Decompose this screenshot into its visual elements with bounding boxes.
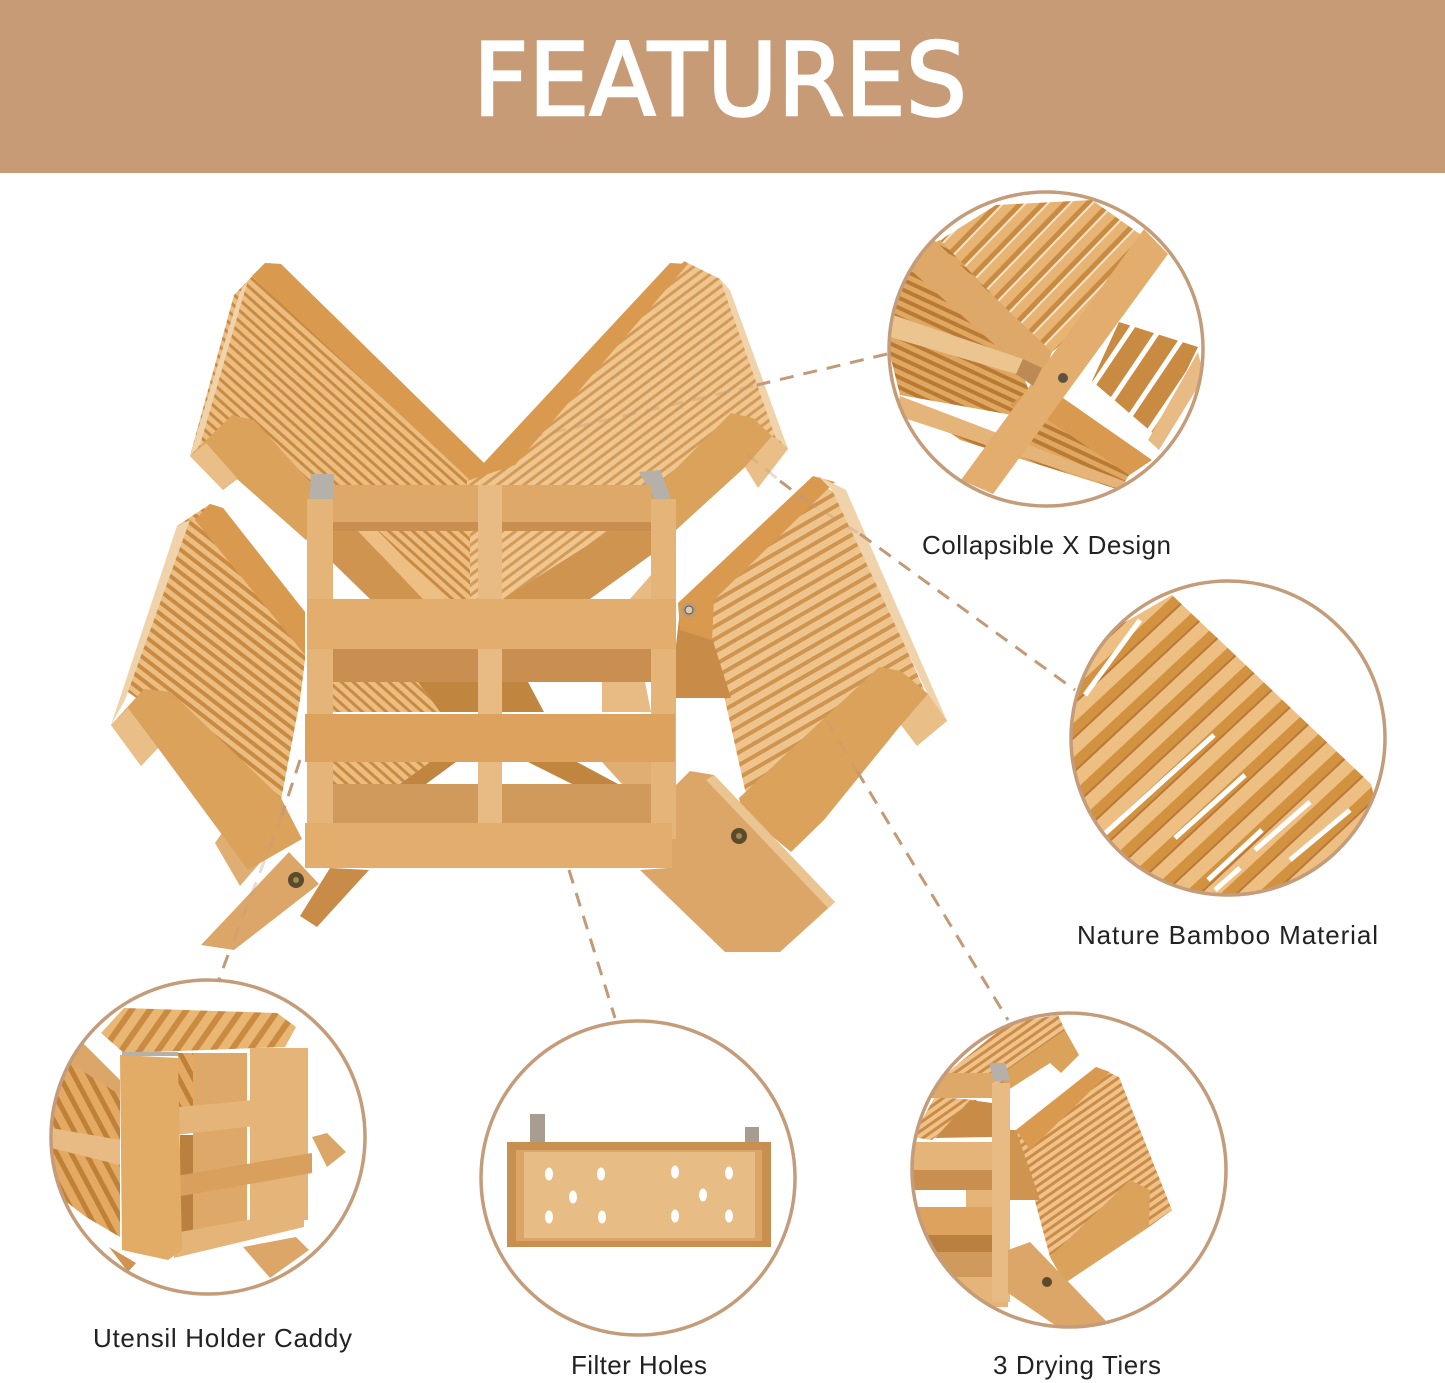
title: FEATURES <box>473 21 967 139</box>
foot left <box>201 852 369 950</box>
icon: pivot screw <box>1058 373 1068 383</box>
lower right wing <box>670 476 947 852</box>
icon: foot screw <box>1042 1277 1052 1287</box>
panel: 3 drying tiers <box>912 1013 1226 1332</box>
utensil caddy <box>305 470 676 868</box>
header banner <box>0 0 1445 173</box>
label: 3 drying tiers: 3 Drying Tiers <box>993 1350 1161 1380</box>
circle outline <box>889 192 1203 506</box>
lower left wing <box>111 504 305 886</box>
main product: bamboo dish rack <box>111 261 947 952</box>
label: nature bamboo material: Nature Bamboo Material <box>1077 920 1378 950</box>
white slat gaps <box>1085 620 1350 890</box>
tray base <box>507 1142 771 1247</box>
drainage holes <box>545 1166 733 1224</box>
circle outline <box>1071 581 1385 895</box>
circle outline <box>51 980 365 1294</box>
metal hooks <box>309 470 671 502</box>
icon: pivot screw <box>682 603 696 617</box>
label: collapsible x design: Collapsible X Design <box>922 530 1171 560</box>
upper right wing <box>462 261 788 600</box>
upper left wing <box>190 263 484 600</box>
icon: foot screw right <box>731 828 747 844</box>
dashed leader lines <box>218 354 1075 1020</box>
metal hooks <box>530 1114 759 1142</box>
panel: collapsible x design <box>880 192 1204 506</box>
icon: foot screw left <box>288 872 304 888</box>
circle outline <box>912 1013 1226 1327</box>
foot right <box>640 771 835 952</box>
center x legs behind caddy <box>333 531 651 784</box>
panel: filter holes <box>481 1021 795 1335</box>
label: utensil holder caddy: Utensil Holder Caddy <box>93 1323 352 1353</box>
label: filter holes: Filter Holes <box>571 1350 707 1380</box>
panel: utensil holder caddy <box>51 980 365 1294</box>
panel: nature bamboo material <box>1050 581 1400 900</box>
